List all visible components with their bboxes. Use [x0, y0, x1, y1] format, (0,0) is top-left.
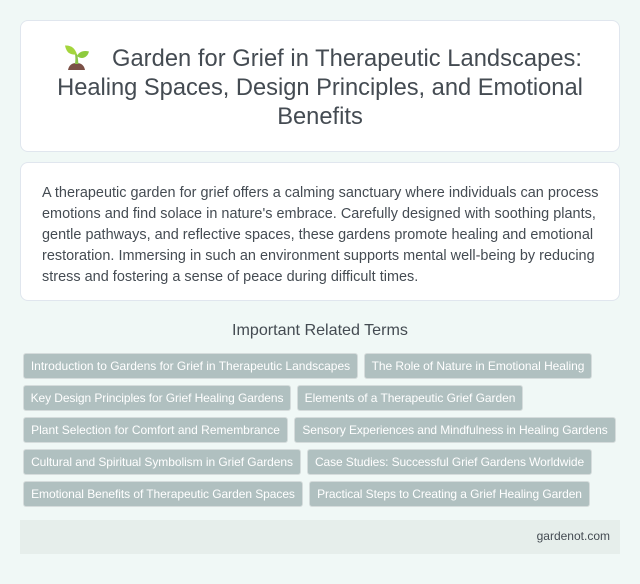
text block: description: emotions and find solace in nature's embrace. Carefully designed with soothing plants,: [42, 206, 596, 222]
panel: title card: [20, 20, 620, 152]
tag: Case Studies: Successful Grief Gardens Worldwide: [315, 455, 584, 469]
text block: description: gentle pathways, and reflective spaces, these gardens promote healing and emotional: [42, 227, 593, 243]
text block: description: A therapeutic garden for grief offers a calming sanctuary where individuals can process: [42, 185, 598, 201]
text block: description: stress and fostering a sense of peace during difficult times.: [42, 269, 418, 285]
tag: Emotional Benefits of Therapeutic Garden Spaces: [31, 487, 295, 501]
heading: title: Benefits: [277, 104, 363, 130]
text block: description: [42, 185, 598, 285]
panel: related term tags: [23, 353, 616, 507]
tag: [307, 449, 592, 475]
tag: The Role of Nature in Emotional Healing: [372, 359, 584, 373]
icon: seedling: [65, 46, 89, 70]
heading: important related terms: Important Related Terms: [232, 321, 408, 339]
text block: description: restoration. Immersing in such an environment supports mental well-being by reducing: [42, 248, 595, 264]
tag: [23, 481, 303, 507]
tag: [294, 417, 616, 443]
tag: [23, 449, 301, 475]
footer: source: [20, 520, 620, 554]
tag: Introduction to Gardens for Grief in Therapeutic Landscapes: [31, 359, 350, 373]
tag: Elements of a Therapeutic Grief Garden: [305, 391, 515, 405]
footer: source: gardenot.com: [537, 529, 610, 543]
tag: [23, 353, 358, 379]
tag: [23, 385, 291, 411]
panel: description card: [20, 162, 620, 301]
tag: [364, 353, 592, 379]
heading: title: Garden for Grief in Therapeutic Landscapes:: [112, 46, 582, 72]
heading: title: [57, 46, 583, 130]
tag: Sensory Experiences and Mindfulness in Healing Gardens: [302, 423, 608, 437]
heading: title: Healing Spaces, Design Principles, and Emotional: [57, 75, 583, 101]
tag: [309, 481, 590, 507]
tag: Key Design Principles for Grief Healing Gardens: [31, 391, 283, 405]
tag: [23, 417, 288, 443]
tag: Practical Steps to Creating a Grief Healing Garden: [317, 487, 582, 501]
tag: Cultural and Spiritual Symbolism in Grief Gardens: [31, 455, 293, 469]
tag: [297, 385, 523, 411]
tag: Plant Selection for Comfort and Remembrance: [31, 423, 280, 437]
